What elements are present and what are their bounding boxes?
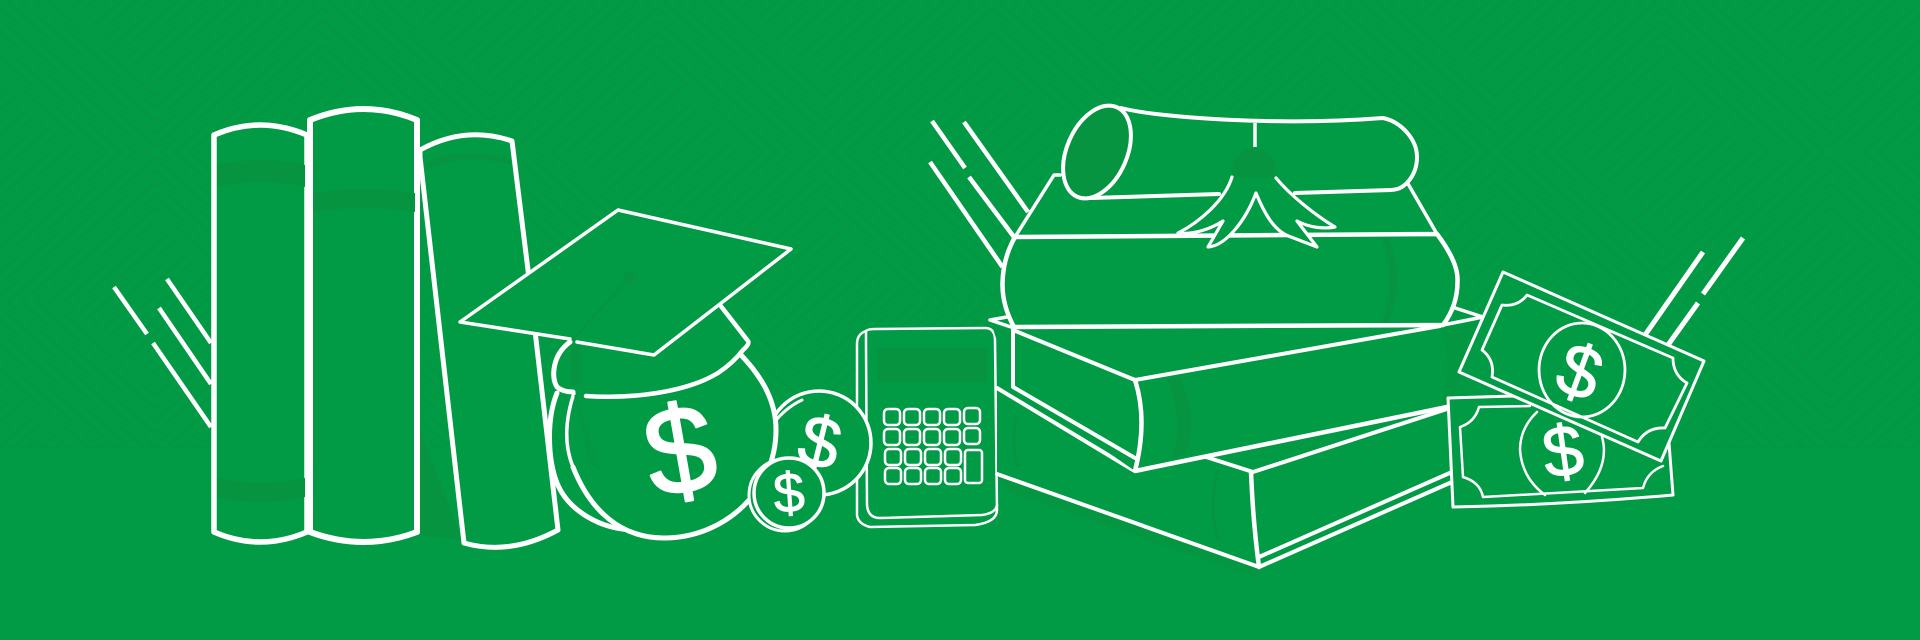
diploma scroll [1050, 95, 1417, 247]
calculator keys [884, 408, 982, 484]
background: chevron wall pattern [0, 0, 1920, 448]
calculator screen [877, 348, 987, 382]
speed lines: upper centre [930, 121, 1028, 267]
graduation cap [460, 210, 791, 397]
speed lines: left [114, 279, 211, 427]
background: floor line [0, 447, 1920, 449]
dollar sign: medium coin: $ [791, 399, 849, 487]
large coin [567, 355, 776, 538]
shadow: leaning book on floor [420, 430, 462, 540]
small coin [749, 458, 824, 531]
dollar sign: lower banknote: $ [1538, 410, 1588, 494]
book: left upright [214, 125, 307, 542]
banknote: lower [1448, 396, 1673, 507]
medium coin [767, 391, 871, 495]
book stack: bottom book [997, 386, 1452, 567]
diploma ribbon [1178, 123, 1335, 247]
dollar sign: small coin: $ [771, 460, 807, 525]
calculator [857, 328, 997, 527]
diploma end [1050, 95, 1144, 209]
banknote: upper [1459, 272, 1704, 461]
book: leaning right [420, 135, 558, 547]
large coin behind cap: outer rim [549, 390, 776, 538]
dollar sign: upper banknote: $ [1546, 325, 1613, 418]
book: middle upright [310, 109, 417, 542]
shadow: under book stack [997, 476, 1259, 577]
book stack: top book with open cover [1002, 175, 1458, 327]
book stack: middle book [990, 307, 1483, 471]
cap tassel shadow [570, 271, 636, 385]
dollar sign: large coin: $ [634, 377, 726, 525]
speed lines: right [1645, 238, 1743, 345]
